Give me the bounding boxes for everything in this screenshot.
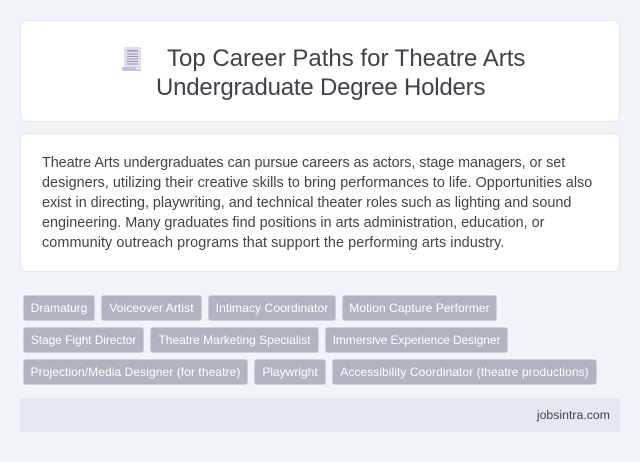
tag: Stage Fight Director: [31, 333, 136, 347]
title: Top Career Paths for Theatre Arts: [167, 45, 525, 72]
title: [156, 45, 525, 101]
panel: header: [20, 20, 620, 122]
panel: description: [20, 133, 620, 272]
tag: [332, 359, 597, 385]
text block: description: exist in directing, playwriting, and technical theater roles such as lighting and sound: [42, 195, 571, 211]
tag: [23, 327, 144, 353]
tag: [23, 359, 248, 385]
title: Undergraduate Degree Holders: [156, 74, 485, 101]
tag: Accessibility Coordinator (theatre productions): [340, 365, 589, 379]
text block: description: Theatre Arts undergraduates can pursue careers as actors, stage managers, or set: [42, 155, 565, 171]
tag: [23, 295, 95, 321]
text block: description: engineering. Many graduates find positions in arts administration, education, or: [42, 215, 544, 231]
icon: paper scroll: [122, 47, 141, 71]
text block: description: designers, utilizing their creative skills to bring performances to life. Opportunities also: [42, 175, 592, 191]
footer source text: jobsintra.com: [537, 408, 610, 422]
tag: Intimacy Coordinator: [216, 301, 328, 315]
tag: [101, 295, 202, 321]
tag: Immersive Experience Designer: [333, 333, 500, 347]
text block: description: [42, 155, 592, 251]
tag: [342, 295, 497, 321]
tag: Projection/Media Designer (for theatre): [31, 365, 240, 379]
tag: [150, 327, 319, 353]
tag list: career paths: [23, 295, 597, 385]
tag: [254, 359, 326, 385]
tag: Theatre Marketing Specialist: [158, 333, 311, 347]
tag: Playwright: [262, 365, 318, 379]
tag: [208, 295, 336, 321]
text block: description: community outreach programs that support the performing arts industry.: [42, 235, 504, 251]
tag: [325, 327, 508, 353]
tag: Voiceover Artist: [109, 301, 194, 315]
tag: Motion Capture Performer: [349, 301, 490, 315]
footer: [20, 398, 620, 432]
tag: Dramaturg: [31, 301, 87, 315]
